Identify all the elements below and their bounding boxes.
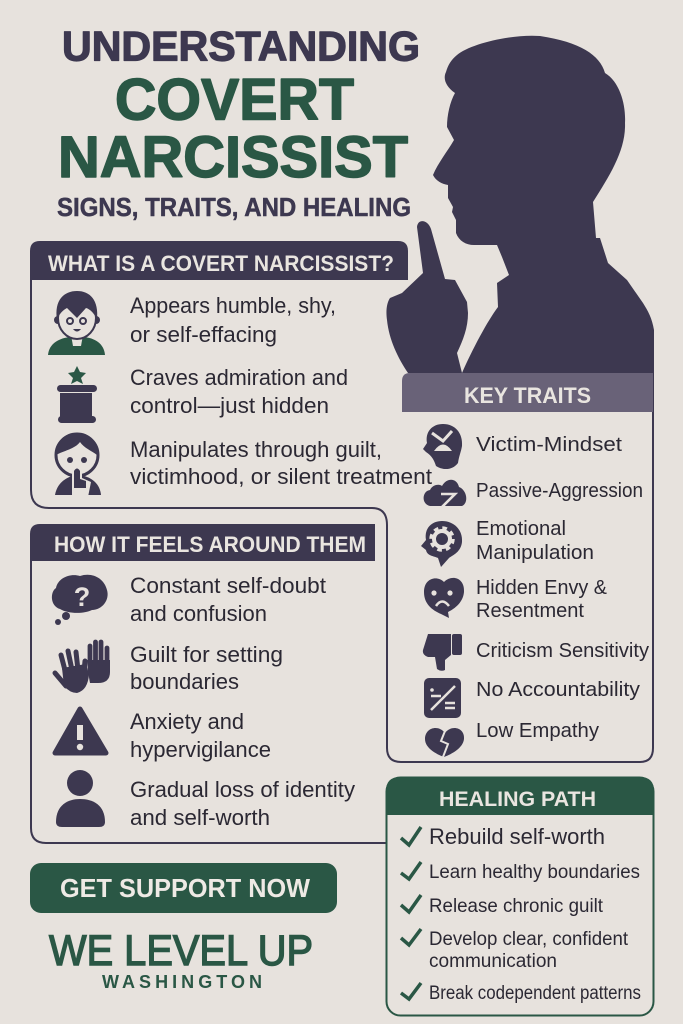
text: guilt for boundaries: boundaries (130, 669, 239, 694)
panel: how it feels outline (31, 550, 387, 843)
title: NARCISSIST (58, 125, 408, 190)
logo: we level up washington: WE LEVEL UP (49, 927, 313, 975)
checklist: healing steps: Develop clear, confident (429, 929, 629, 950)
text: craves admiration (130, 365, 348, 418)
trait: hidden envy and resentment: Resentment (476, 600, 584, 622)
panel: healing path: HEALING PATH (439, 788, 596, 811)
icon: humble person (48, 291, 105, 355)
text: anxiety (130, 709, 271, 762)
panel: healing path (386, 777, 654, 1016)
text: constant self-doubt (130, 573, 326, 626)
trait: no accountability (424, 678, 640, 718)
text: appears humble: or self-effacing (130, 322, 277, 347)
icon: question thought cloud (52, 575, 108, 625)
panel: key traits and what-is outline (31, 270, 653, 762)
text: appears humble (130, 293, 336, 347)
text: appears humble: Appears humble, shy, (130, 293, 336, 318)
heading: how it feels around them (30, 524, 375, 561)
trait: hidden envy and resentment: Hidden Envy & (476, 577, 608, 599)
checklist: healing steps: Release chronic guilt (429, 896, 604, 917)
icon: person shushing (55, 433, 101, 497)
checklist: healing steps: Learn healthy boundaries (429, 862, 640, 883)
text: constant self-doubt: and confusion (130, 601, 267, 626)
text: loss of identity: Gradual loss of identity (130, 777, 355, 802)
text: manipulates: Manipulates through guilt, (130, 437, 382, 462)
trait: hidden envy and resentment (424, 577, 608, 622)
text: loss of identity: and self-worth (130, 805, 270, 830)
trait: criticism sensitivity: Criticism Sensitivity (476, 640, 649, 662)
trait: passive-aggression (424, 480, 643, 513)
trait: passive-aggression: Passive-Aggression (476, 480, 643, 502)
trait: victim-mindset (423, 424, 622, 469)
title (57, 22, 420, 222)
title: SIGNS, TRAITS, AND HEALING (57, 194, 411, 222)
trait: emotional manipulation (421, 518, 594, 567)
text: anxiety: hypervigilance (130, 737, 271, 762)
trait: low empathy: Low Empathy (476, 720, 599, 742)
logo: we level up washington (49, 927, 313, 992)
silhouette: man with finger to lips (386, 36, 654, 373)
trait: criticism sensitivity (423, 634, 649, 671)
checklist: healing steps (401, 824, 641, 1004)
heading: what is a covert narcissist: WHAT IS A COVERT NARCISSIST? (48, 251, 394, 276)
button: get support now: GET SUPPORT NOW (60, 873, 310, 903)
heading: key traits (402, 373, 653, 412)
text: constant self-doubt: Constant self-doubt (130, 573, 326, 598)
heading: what is a covert narcissist (30, 241, 408, 280)
heading: key traits: KEY TRAITS (464, 383, 591, 408)
title: UNDERSTANDING (62, 22, 420, 70)
button: get support now (30, 863, 337, 913)
icon: person (56, 770, 105, 827)
text: loss of identity (130, 777, 355, 830)
text: manipulates: victimhood, or silent treatment (130, 464, 432, 489)
text: manipulates (130, 437, 432, 489)
icon: star on podium (57, 366, 97, 423)
text: guilt for boundaries: Guilt for setting (130, 642, 283, 667)
trait: emotional manipulation: Manipulation (476, 542, 594, 564)
logo: we level up washington: WASHINGTON (102, 972, 262, 992)
icon: raised hands (55, 642, 110, 693)
trait: low empathy (425, 720, 599, 757)
text: anxiety: Anxiety and (130, 709, 244, 734)
trait: emotional manipulation: Emotional (476, 518, 566, 540)
trait: no accountability: No Accountability (476, 679, 640, 701)
text: guilt for boundaries (130, 642, 283, 694)
checklist: healing steps: communication (429, 951, 557, 972)
text: craves admiration: Craves admiration and (130, 365, 348, 390)
text: craves admiration: control—just hidden (130, 393, 329, 418)
heading: how it feels around them: HOW IT FEELS AROUND THEM (54, 532, 366, 557)
checklist: healing steps: Break codependent patterns (429, 983, 641, 1004)
heading: healing path (386, 777, 654, 815)
icon: question thought cloud: ? (74, 582, 90, 612)
trait: victim-mindset: Victim-Mindset (476, 434, 622, 456)
title: COVERT (115, 68, 354, 132)
checklist: healing steps: Rebuild self-worth (429, 824, 605, 849)
icon: warning triangle (55, 709, 106, 753)
